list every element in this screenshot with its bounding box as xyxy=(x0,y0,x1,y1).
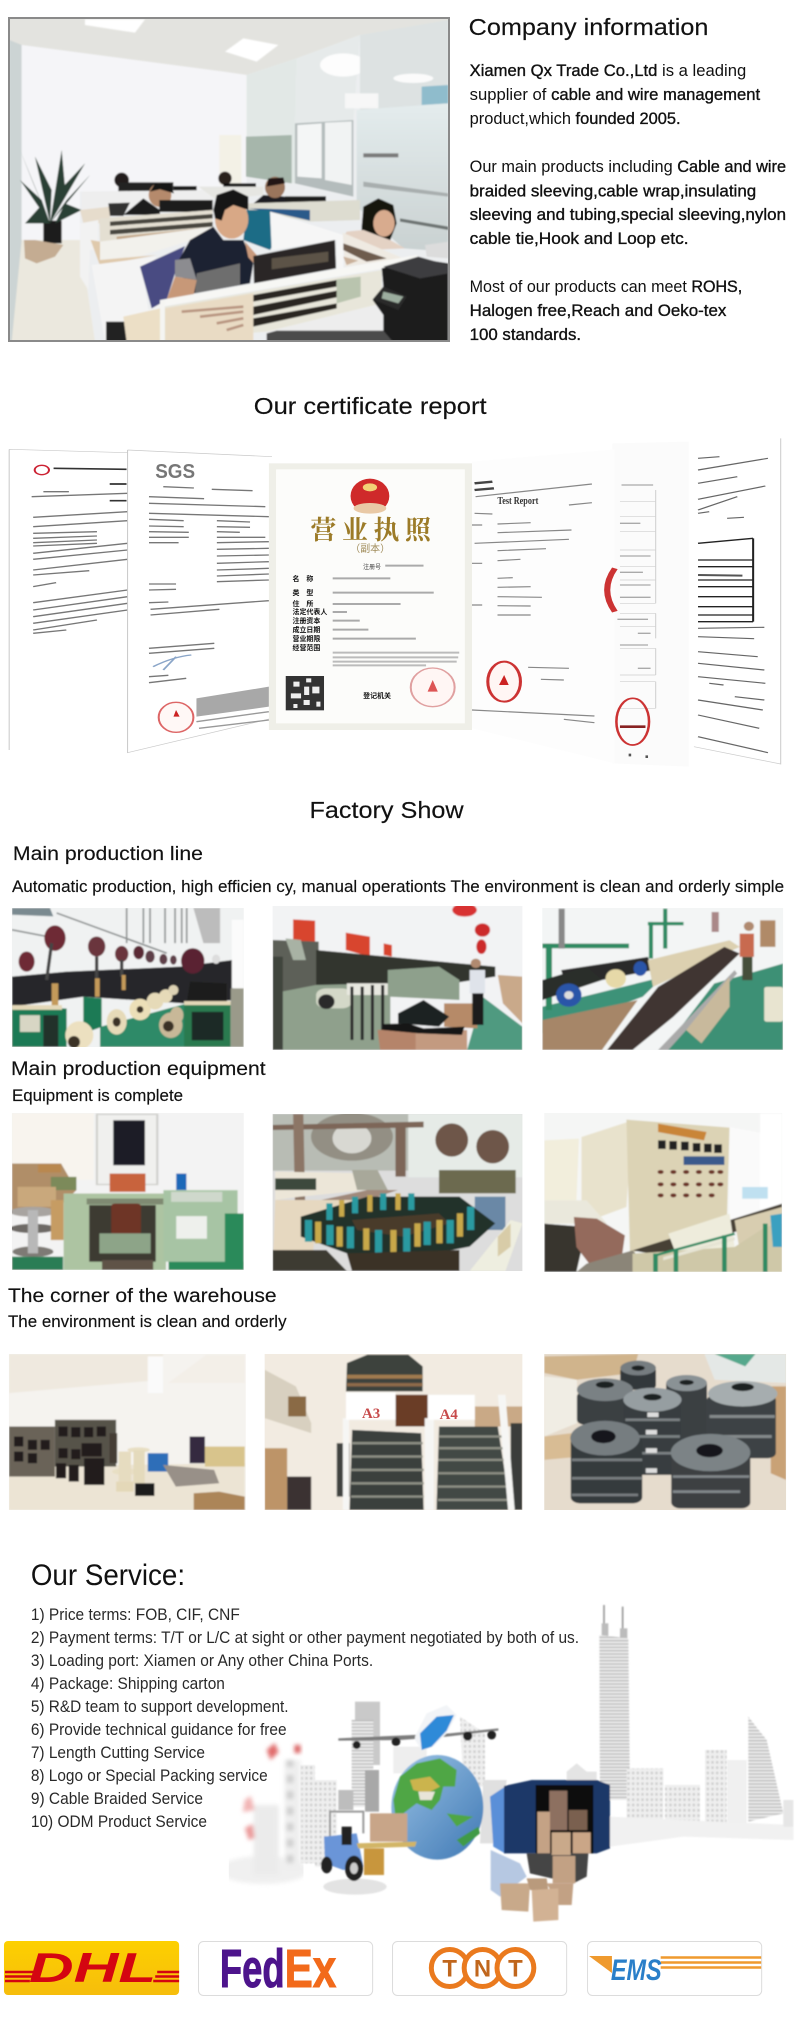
label: A4 shelf: A4 xyxy=(440,1407,458,1423)
photo: needle looms with red lanterns xyxy=(255,900,531,1057)
photo: braiding machines row xyxy=(0,900,260,1057)
certificate page: business licence xyxy=(269,463,472,730)
service list xyxy=(31,1605,579,1831)
certificate fan: 注册号 xyxy=(363,563,381,571)
logo: TNT: T xyxy=(508,1955,523,1983)
certificate fan: 营业期限 xyxy=(293,634,320,643)
certificate fan xyxy=(9,438,781,767)
certificate fan: 类 型 xyxy=(293,588,313,597)
logo: FedEx xyxy=(199,1939,373,1999)
text: production line description: Automatic production, high efficien cy, manual operationts The environment is clean and orderly simple xyxy=(12,878,784,896)
certificate fan: 营业执照 xyxy=(310,516,433,545)
illustration: faded city on left of service list xyxy=(219,1743,308,1884)
logo: TNT xyxy=(393,1942,567,1996)
heading: Main production line: Main production line xyxy=(13,843,203,865)
text: warehouse description: The environment is clean and orderly xyxy=(8,1313,287,1331)
globe xyxy=(391,1755,483,1860)
text block: main products xyxy=(470,158,786,248)
service list: 3) Loading port: Xiamen or Any other China Ports. xyxy=(31,1651,373,1670)
round seal xyxy=(411,668,455,707)
logo: EMS xyxy=(588,1942,762,1996)
photo: warehouse interior xyxy=(0,1350,255,1517)
label: A3 shelf: A3 xyxy=(362,1406,380,1422)
photo: cabling line with spools xyxy=(531,900,796,1057)
certificate fan: 住 所 xyxy=(293,599,313,608)
text block: main products: braided sleeving,cable wrap,insulating xyxy=(470,182,756,201)
forklift xyxy=(321,1770,417,1895)
heading: Our certificate report: Our certificate report xyxy=(254,393,487,419)
service list: 1) Price terms: FOB, CIF, CNF xyxy=(31,1605,240,1624)
truck and container xyxy=(490,1780,610,1922)
certificate page: faded pages on right xyxy=(611,442,689,767)
text block: standards: 100 standards. xyxy=(470,326,581,344)
text block: standards: Most of our products can meet ROHS, xyxy=(470,278,742,296)
text block: company intro: supplier of cable and wire management xyxy=(470,86,761,104)
illustration: logistics scene xyxy=(300,1605,793,1922)
text block: standards xyxy=(470,278,742,344)
certificate fan: 法定代表人 xyxy=(293,607,327,616)
logo: FedEx: Ex xyxy=(285,1939,336,1999)
certificate page: UL online certification xyxy=(9,449,128,750)
logo: TNT: N xyxy=(474,1955,491,1983)
text block: standards: Halogen free,Reach and Oeko-tex xyxy=(470,302,726,320)
text block: company intro: Xiamen Qx Trade Co.,Ltd is a leading xyxy=(470,62,746,80)
certificate fan: SGS xyxy=(155,461,195,483)
certificate fan: 注册资本 xyxy=(293,616,320,625)
logo: EMS: EMS xyxy=(611,1954,662,1987)
service list: 10) ODM Product Service xyxy=(31,1812,207,1831)
service list: 4) Package: Shipping carton xyxy=(31,1674,225,1693)
certificate fan: 名 称 xyxy=(293,574,313,583)
certificate fan: Test Report xyxy=(497,496,539,507)
certificate fan: （副本） xyxy=(350,542,390,555)
photo: braiding machine carriers xyxy=(255,1107,531,1277)
photo: green winding machine xyxy=(0,1107,256,1277)
heading: Our Service: Our Service: xyxy=(31,1559,185,1592)
service list: 9) Cable Braided Service xyxy=(31,1789,203,1808)
heading: The corner of the warehouse: The corner of the warehouse xyxy=(8,1285,277,1307)
text block: main products: Our main products including Cable and wire xyxy=(470,158,786,176)
logo: TNT: T xyxy=(442,1955,457,1983)
certificate page: SGS test report xyxy=(128,450,272,753)
service list: 2) Payment terms: T/T or L/C at sight or other payment negotiated by both of us. xyxy=(31,1628,579,1647)
certificate fan: 经营范围 xyxy=(293,643,320,652)
photo: extruder control cabinet xyxy=(530,1107,796,1277)
photo: stacked black coils xyxy=(536,1350,796,1517)
logo: DHL xyxy=(4,1941,179,1995)
logo: DHL: DHL xyxy=(29,1944,156,1991)
certificate page: test report xyxy=(472,449,615,763)
QR code xyxy=(286,676,324,710)
text block: company intro xyxy=(470,62,761,128)
licence fields placeholder lines xyxy=(333,566,459,665)
text block: main products: cable tie,Hook and Loop etc. xyxy=(470,230,689,248)
certificate page: component sheet xyxy=(694,438,781,764)
photo: shelved cable coils A3 A4 xyxy=(255,1350,531,1517)
service list: 7) Length Cutting Service xyxy=(31,1743,205,1762)
certificate fan: 成立日期 xyxy=(293,625,320,634)
certificate fan: 登记机关 xyxy=(363,691,391,700)
text: equipment description: Equipment is complete xyxy=(12,1087,183,1105)
national emblem xyxy=(351,479,389,514)
service list: 6) Provide technical guidance for free xyxy=(31,1720,287,1739)
photo: office staff at desks xyxy=(0,10,467,357)
text block: company intro: product,which founded 2005. xyxy=(470,110,681,128)
heading: Factory Show: Factory Show xyxy=(309,797,464,823)
heading: Main production equipment: Main production equipment xyxy=(11,1058,266,1080)
logo: FedEx: Fed xyxy=(220,1939,285,1999)
city skyline xyxy=(300,1605,793,1867)
airplane xyxy=(338,1705,498,1750)
heading: Company information: Company information xyxy=(469,14,708,40)
service list: 8) Logo or Special Packing service xyxy=(31,1766,268,1785)
text block: main products: sleeving and tubing,special sleeving,nylon xyxy=(470,206,786,224)
service list: 5) R&D team to support development. xyxy=(31,1697,289,1716)
